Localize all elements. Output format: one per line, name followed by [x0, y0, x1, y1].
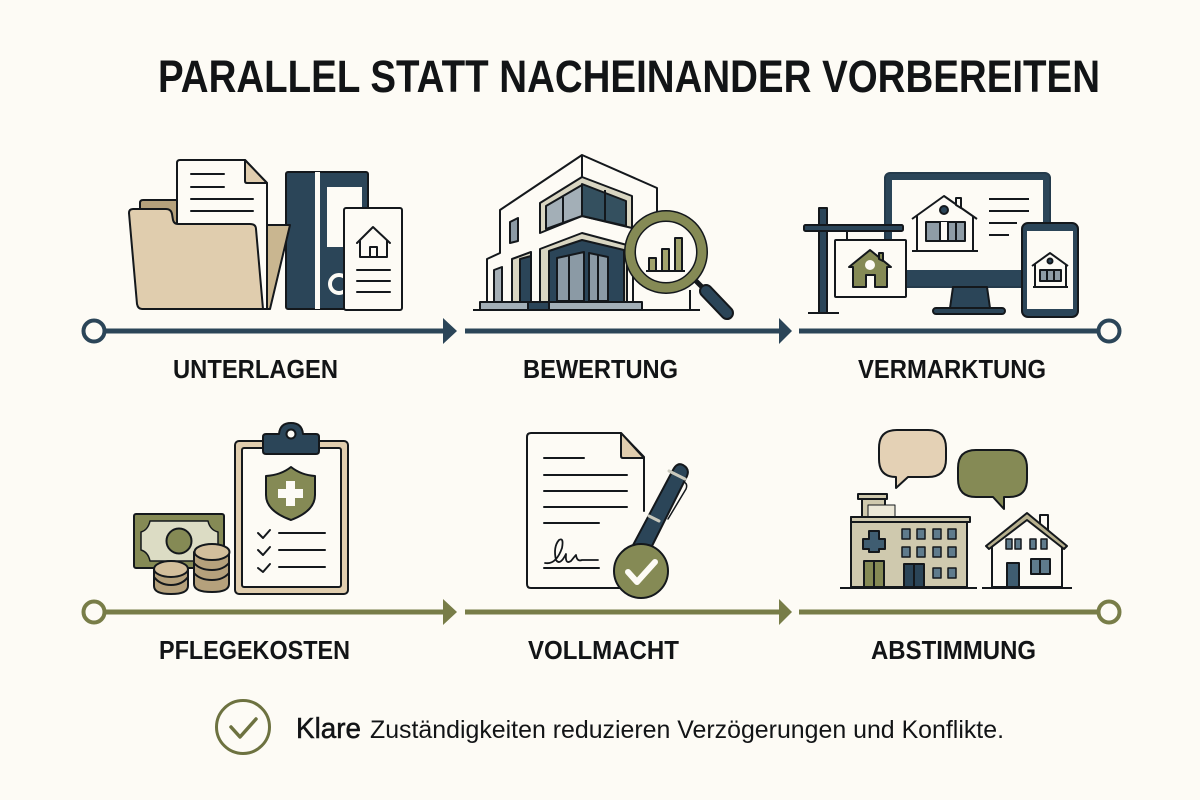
icon: plinth and ground — [473, 290, 700, 310]
label: Vermarktung: VERMARKTUNG — [858, 354, 1046, 384]
callout: footer sentence: Klare — [296, 713, 361, 745]
label: Bewertung: BEWERTUNG — [523, 354, 678, 384]
callout: footer sentence: Zuständigkeiten reduzieren Verzögerungen und Konflikte. — [370, 716, 1004, 744]
panel: Abstimmung icon — [840, 430, 1072, 588]
icon: coin stacks — [154, 544, 230, 594]
label: Abstimmung: ABSTIMMUNG — [871, 635, 1036, 665]
icon: monitor — [885, 173, 1050, 314]
icon: house document — [344, 208, 402, 310]
icon: for-sale sign — [804, 208, 906, 313]
label: Unterlagen: UNTERLAGEN — [173, 354, 338, 384]
icon: clipboard — [235, 423, 348, 594]
icon: binder — [286, 172, 368, 309]
icon: folder flap — [264, 225, 290, 309]
panel: Bewertung icon — [473, 155, 727, 313]
timeline: row 1 — [84, 318, 1120, 344]
label: Vollmacht: VOLLMACHT — [528, 635, 679, 665]
icon: pen — [632, 464, 688, 550]
panel: Unterlagen icon — [129, 160, 402, 310]
icon: hospital — [851, 494, 970, 587]
icon: folder back — [140, 200, 180, 226]
icon: building outline — [487, 155, 657, 310]
panel: Vermarktung icon — [804, 173, 1078, 317]
icon: tablet — [1022, 223, 1078, 317]
icon: lower facade — [540, 233, 627, 302]
icon: magnifying glass with chart — [630, 216, 727, 313]
icon: house — [986, 513, 1067, 587]
icon: signed document — [527, 433, 644, 588]
timeline: row 2 — [84, 599, 1120, 625]
icon: folder front — [129, 209, 263, 309]
panel: Pflegekosten icon — [134, 423, 348, 594]
icon: check badge — [614, 544, 668, 598]
icon: small windows and door — [494, 218, 531, 302]
icon: footer check circle — [216, 700, 270, 754]
icon: speech bubble tan — [879, 430, 946, 488]
icon: banknote — [134, 514, 224, 568]
icon: document in folder — [177, 160, 267, 309]
panel: Vollmacht icon — [527, 433, 688, 598]
label: Pflegekosten: PFLEGEKOSTEN — [159, 635, 350, 665]
icon: upper windows — [540, 177, 632, 233]
icon: ground lines — [840, 587, 1072, 589]
icon: speech bubble olive — [958, 450, 1027, 509]
